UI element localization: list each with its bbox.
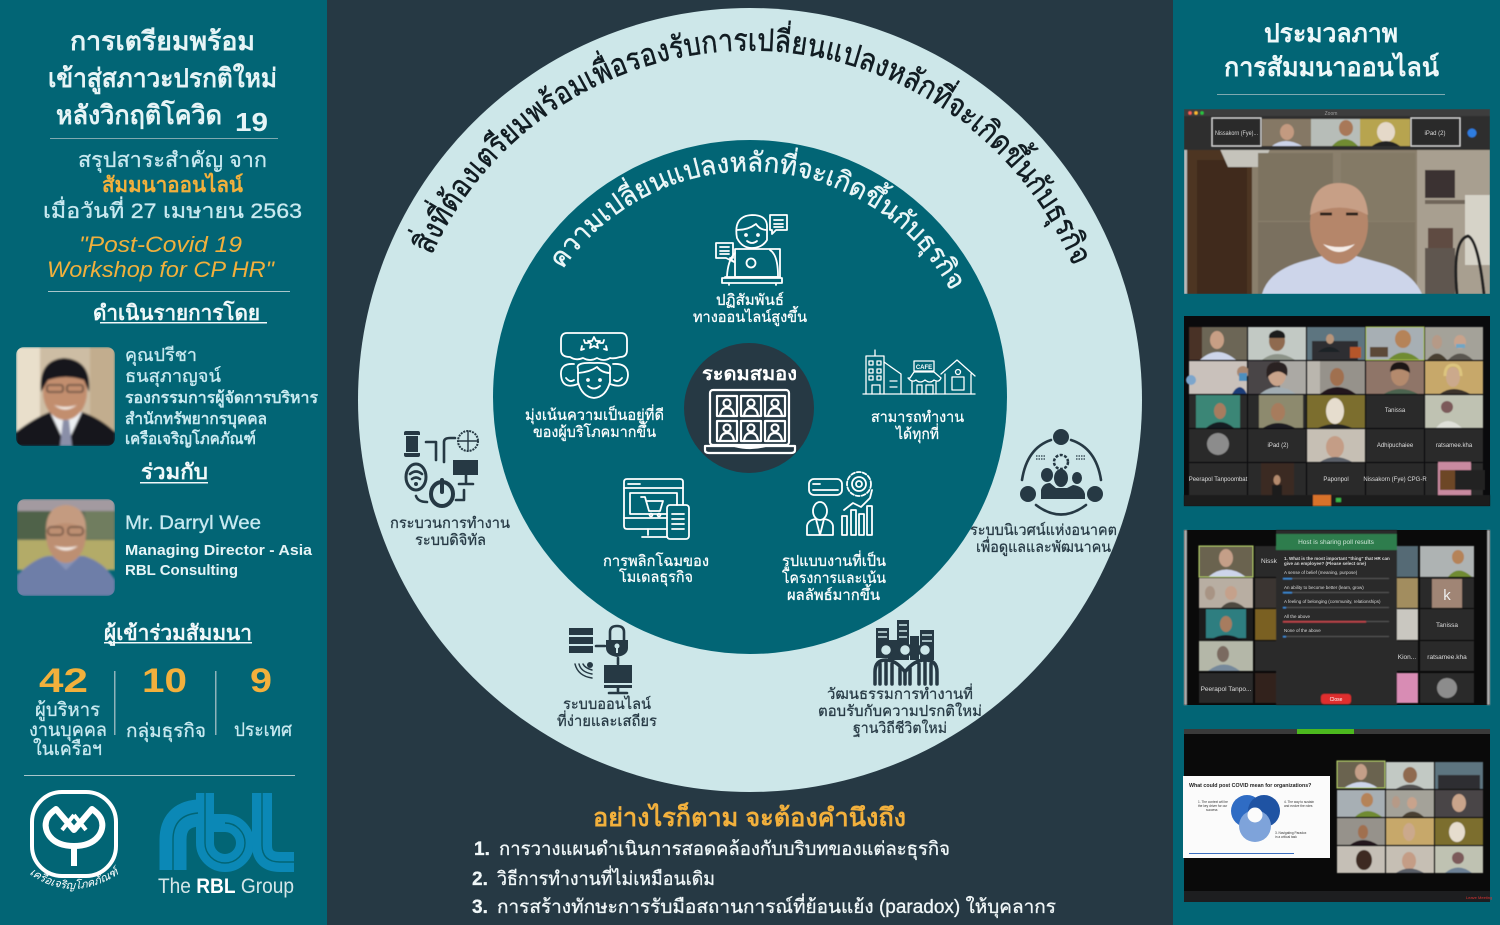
panel: central circle diagram bbox=[358, 8, 1142, 792]
speaker details: Mr. Darryl Wee bbox=[125, 513, 261, 534]
photo: moderator bbox=[16, 347, 115, 446]
gallery labels: ratsamee.kha bbox=[1436, 443, 1473, 449]
slide: 3. Navigating Paradox bbox=[1275, 831, 1307, 835]
heading: together with: ร่วมกับ bbox=[141, 461, 208, 484]
icon: server, lock and computer bbox=[569, 626, 632, 693]
title: การเตรียมพร้อม bbox=[70, 26, 255, 56]
title bbox=[48, 26, 277, 137]
list: 3. bbox=[472, 897, 488, 918]
stat: 9 countries: ประเทศ bbox=[234, 720, 292, 741]
logo: CP bbox=[30, 790, 118, 892]
icon: ecosystem people cycle bbox=[1020, 429, 1103, 514]
screenshot: poll results bbox=[1184, 530, 1490, 705]
moderator details: สำนักทรัพยากรบุคคล bbox=[125, 410, 267, 429]
screenshot: speaker view: iPad (2) bbox=[1424, 131, 1446, 137]
speaker details: Managing Director - Asia bbox=[125, 542, 313, 559]
list: วิธีการทำงานที่ไม่เหมือนเดิม bbox=[497, 865, 715, 890]
heading: seminar images bbox=[1224, 18, 1439, 82]
slide bbox=[1183, 776, 1330, 858]
screenshot: speaker view bbox=[1184, 109, 1490, 294]
item: new normal culture: วัฒนธรรมการทำงานที่ bbox=[827, 683, 973, 703]
logo: CP: เครือเจริญโภคภัณฑ์ bbox=[30, 864, 118, 892]
subtitle: seminar summary: เมื่อวันที่ 27 เมษายน 2563 bbox=[43, 196, 302, 223]
panel: considerations bbox=[472, 802, 1056, 919]
item: new normal culture: ฐานวิถีชีวิตใหม่ bbox=[853, 719, 947, 737]
poll labels: A sense of belief (meaning, purpose) bbox=[1284, 570, 1358, 575]
item: online interaction bbox=[693, 215, 807, 326]
icon: video call laptop bbox=[705, 390, 795, 453]
inner circle: main business changes bbox=[493, 140, 1007, 654]
moderator details bbox=[125, 345, 318, 449]
photo: speaker bbox=[17, 499, 115, 596]
center circle: brainstorm bbox=[684, 343, 814, 473]
poll labels: An ability to become better (learn, grow) bbox=[1284, 585, 1364, 590]
poll labels: give an employee? (Please select one) bbox=[1284, 561, 1367, 566]
gallery labels: Nissakorn (Fye) CPG-R bbox=[1363, 477, 1427, 483]
icon: person, gear and chart bbox=[807, 472, 872, 535]
gallery labels: Paponpol bbox=[1323, 477, 1349, 483]
panel: left summary bbox=[0, 0, 327, 925]
slide: 4. The way to sustain bbox=[1284, 800, 1314, 804]
stat: 42 executives: งานบุคคล bbox=[29, 720, 107, 742]
item: work anywhere: สามารถทำงาน bbox=[871, 409, 964, 426]
item: work anywhere: CAFE bbox=[916, 365, 932, 371]
item: digital processes bbox=[390, 431, 510, 549]
poll labels: Nissk bbox=[1261, 558, 1278, 565]
item: work anywhere bbox=[863, 350, 975, 444]
gallery labels: Peerapol Tanpoombat bbox=[1189, 477, 1248, 483]
item: new normal culture: ตอบรับกับความปรกติใหม่ bbox=[818, 702, 982, 720]
item: stable online systems bbox=[557, 626, 657, 730]
item: consumer wellbeing: ของผู้บริโภคมากขึ้น bbox=[533, 421, 656, 441]
screenshot labels: Nissakorn (Fye)... bbox=[1215, 131, 1258, 137]
icon: digital devices bbox=[404, 431, 478, 506]
item: consumer wellbeing bbox=[525, 333, 664, 441]
poll labels: ratsamee.kha bbox=[1427, 654, 1467, 661]
heading: participants: ผู้เข้าร่วมสัมมนา bbox=[104, 621, 252, 647]
poll labels: None of the above bbox=[1284, 628, 1321, 633]
item: business model transformation bbox=[603, 479, 709, 587]
outer ring: things to prepare: สิ่งที่ต้องเตรียมพร้อมเพื่อรองรับการเปลี่ยนแปลงหลักที่จะเกิดขึ้นกับธุรกิจ bbox=[408, 20, 1087, 264]
item: project based work bbox=[782, 472, 886, 604]
item: project based work: รูปแบบงานที่เป็น bbox=[782, 550, 886, 570]
screenshot: speaker view: Zoom bbox=[1325, 111, 1337, 117]
slide: and evolve the roles bbox=[1284, 804, 1313, 808]
poll labels bbox=[1201, 539, 1467, 703]
screenshot: slide share bbox=[1183, 729, 1492, 902]
workshop name bbox=[47, 232, 275, 282]
item: project based work: ผลลัพธ์มากขึ้น bbox=[787, 584, 880, 604]
item: stable online systems: ระบบออนไลน์ bbox=[563, 695, 651, 713]
slide: 1. The context will be bbox=[1198, 800, 1228, 804]
poll labels: Tanissa bbox=[1436, 622, 1458, 629]
stat: 9 countries: 9 bbox=[250, 662, 272, 700]
stat: 42 executives: ผู้บริหาร bbox=[35, 700, 100, 721]
panel: seminar images bbox=[1173, 0, 1500, 925]
icon: person with laptop and chat bubbles bbox=[716, 215, 787, 285]
list: การสร้างทักษะการรับมือสถานการณ์ที่ย้อนแย้ง (paradox) ให้บุคลากร bbox=[497, 893, 1056, 919]
stat: 10 business groups: กลุ่มธุรกิจ bbox=[126, 721, 206, 743]
slide: the key driver for our bbox=[1198, 804, 1228, 808]
poll labels: Kion... bbox=[1398, 654, 1416, 661]
slide: in a critical task bbox=[1275, 835, 1297, 839]
stat: 10 business groups bbox=[126, 662, 206, 743]
heading: seminar images: การสัมมนาออนไลน์ bbox=[1224, 51, 1439, 82]
title: เข้าสู่สภาวะปรกติใหม่ bbox=[48, 63, 277, 95]
gallery labels: Adhipuchaiee bbox=[1377, 443, 1414, 449]
list bbox=[472, 839, 1056, 919]
icon: office, cafe and home bbox=[863, 350, 975, 394]
stat: 42 executives: 42 bbox=[39, 662, 88, 700]
moderator details: รองกรรมการผู้จัดการบริหาร bbox=[125, 389, 318, 409]
item: business model transformation: การพลิกโฉมของ bbox=[603, 552, 709, 570]
moderator details: คุณปรีชา bbox=[125, 345, 197, 366]
speaker details: RBL Consulting bbox=[125, 562, 238, 579]
item: new normal culture bbox=[818, 620, 982, 737]
list: การวางแผนดำเนินการสอดคล้องกับบริบทของแต่ละธุรกิจ bbox=[499, 839, 950, 861]
item: online interaction: ปฏิสัมพันธ์ bbox=[716, 292, 784, 309]
gallery labels bbox=[1189, 408, 1473, 483]
subtitle: seminar summary bbox=[43, 149, 302, 223]
item: work anywhere: ได้ทุกที่ bbox=[895, 423, 939, 444]
poll labels: 1. What is the most important "thing" that HR can bbox=[1284, 556, 1390, 561]
item: project based work: โครงการและเน้น bbox=[782, 569, 886, 587]
subtitle: seminar summary: สรุปสาระสำคัญ จาก bbox=[78, 149, 267, 173]
title: หลังวิกฤติโควิด bbox=[56, 99, 222, 130]
item: future ecosystem bbox=[970, 429, 1117, 556]
workshop name: Workshop for CP HR" bbox=[47, 257, 275, 282]
subtitle: seminar summary: สัมมนาออนไลน์ bbox=[102, 172, 244, 197]
list: 2. bbox=[472, 869, 488, 890]
heading: however: อย่างไรก็ตาม จะต้องคำนึงถึง bbox=[593, 802, 906, 832]
slide: What could post COVID mean for organizations? bbox=[1189, 783, 1311, 789]
stat: 42 executives bbox=[29, 662, 107, 760]
icon: ecommerce desktop and phone bbox=[624, 479, 689, 539]
poll labels: k bbox=[1443, 587, 1451, 604]
stat: 9 countries bbox=[234, 662, 292, 741]
gallery labels: iPad (2) bbox=[1267, 443, 1289, 449]
stat: 10 business groups: 10 bbox=[142, 662, 187, 700]
heading: seminar images: ประมวลภาพ bbox=[1264, 18, 1398, 48]
icon: three faces and stars bubble bbox=[561, 333, 628, 398]
screenshot: gallery view bbox=[1184, 316, 1490, 506]
gallery labels: Tanissa bbox=[1385, 408, 1406, 414]
center circle: brainstorm: ระดมสมอง bbox=[702, 364, 797, 385]
item: future ecosystem: ระบบนิเวศน์แห่งอนาคต bbox=[970, 522, 1117, 539]
inner circle: main business changes: ความเปลี่ยนแปลงหลักที่จะเกิดขึ้นกับธุรกิจ bbox=[553, 147, 962, 289]
screenshot: slide share: Leave Meeting bbox=[1466, 895, 1492, 900]
item: future ecosystem: เพื่อดูแลและพัฒนาคน bbox=[976, 536, 1111, 556]
item: online interaction: ทางออนไลน์สูงขึ้น bbox=[693, 306, 807, 326]
moderator details: ธนสุภาญจน์ bbox=[125, 366, 221, 387]
item: digital processes: ระบบดิจิทัล bbox=[415, 532, 486, 549]
moderator details: เครือเจริญโภคภัณฑ์ bbox=[125, 428, 256, 449]
poll labels: A feeling of belonging (community, relationships) bbox=[1284, 599, 1381, 604]
item: digital processes: กระบวนการทำงาน bbox=[390, 515, 510, 532]
poll labels: Peerapol Tanpo... bbox=[1201, 686, 1252, 693]
workshop name: "Post-Covid 19 bbox=[79, 232, 242, 257]
stat: 42 executives: ในเครือฯ bbox=[33, 738, 102, 760]
list: 1. bbox=[474, 839, 490, 860]
speaker details bbox=[125, 513, 313, 579]
poll labels: All the above bbox=[1284, 614, 1311, 619]
item: business model transformation: โมเดลธุรกิจ bbox=[619, 568, 693, 587]
logo: The RBL Group: The RBL Group bbox=[158, 875, 294, 898]
heading: moderated by: ดำเนินรายการโดย bbox=[93, 300, 260, 325]
item: consumer wellbeing: มุ่งเน้นความเป็นอยู่ที่ดี bbox=[525, 404, 664, 425]
poll labels: Close bbox=[1330, 697, 1343, 703]
icon: people and city bbox=[875, 620, 937, 684]
slide: success bbox=[1206, 808, 1218, 812]
title: 19 bbox=[235, 107, 268, 137]
poll labels: Host is sharing poll results bbox=[1298, 539, 1375, 546]
logo: The RBL Group bbox=[158, 793, 294, 898]
item: stable online systems: ที่ง่ายและเสถียร bbox=[557, 710, 657, 730]
